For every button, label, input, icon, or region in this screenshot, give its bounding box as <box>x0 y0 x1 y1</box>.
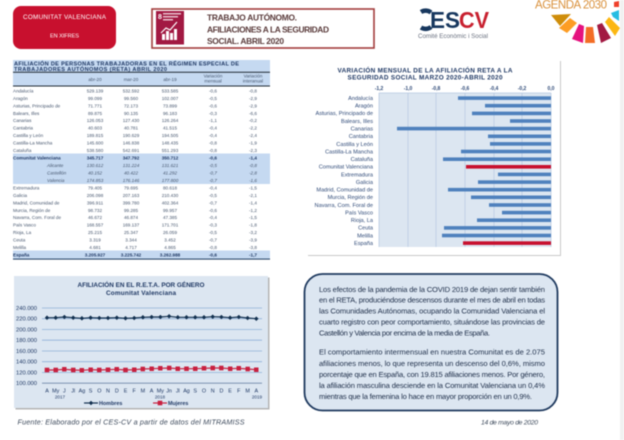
table rows: lower communities: -2,1 <box>249 193 257 198</box>
table rows: upper communities: 126.053 <box>87 118 104 123</box>
table rows: lower communities <box>13 186 257 250</box>
x axis labels: Jn <box>166 388 172 394</box>
chart title: AFILIACIÓN EN EL R.E.T.A. POR GÉNERO <box>78 280 205 289</box>
x axis labels: My <box>52 388 60 394</box>
x axis labels: M <box>141 388 146 394</box>
y axis labels: 220.000 <box>16 317 37 323</box>
x axis labels: S <box>89 388 93 394</box>
category labels: Melilla <box>357 233 374 239</box>
table rows: upper communities: 538.580 <box>87 148 104 153</box>
category labels: Asturias, Principado de <box>315 111 373 117</box>
category labels: Cantabria <box>349 134 374 140</box>
table rows: upper communities: 40.603 <box>88 126 102 131</box>
x axis labels: N <box>211 388 215 394</box>
table rows: lower communities: 80.618 <box>163 186 177 191</box>
table rows: lower communities: -0,5 <box>209 193 217 198</box>
logo: Agenda 2030 wheel <box>535 0 620 43</box>
paragraph 2: la afiliación masculina desciende en la Comunitat Valenciana un 0,4% <box>319 381 545 390</box>
category labels: Canarias <box>351 126 373 132</box>
highlighted rows: Comunitat Valenciana: Valencia <box>47 178 65 183</box>
table rows: lower communities: -3,2 <box>249 230 257 235</box>
badge: Comunitat Valenciana en xifres: EN XIFRES <box>50 34 79 40</box>
x axis labels: F <box>133 388 137 394</box>
table rows: lower communities: 79.695 <box>124 186 138 191</box>
table rows: upper communities: 194.505 <box>162 133 179 138</box>
table rows: lower communities: Madrid, Comunidad de <box>13 200 60 205</box>
highlighted rows: Comunitat Valenciana: 176.146 <box>123 178 140 183</box>
table rows: upper communities: 529.139 <box>87 89 104 94</box>
badge: Comunitat Valenciana en xifres: COMUNITAT VALENCIANA <box>23 14 107 21</box>
y axis labels: 140.000 <box>16 360 37 366</box>
highlighted rows: Comunitat Valenciana <box>13 154 270 184</box>
category labels: Balears, Illes <box>341 119 373 125</box>
table rows: lower communities: -0,3 <box>209 223 217 228</box>
category labels: Navarra, Com. Foral de <box>315 203 373 209</box>
x axis labels: A <box>150 388 154 394</box>
chart title: SEGURIDAD SOCIAL MARZO 2020-ABRIL 2020 <box>348 74 503 82</box>
table rows: lower communities: 25.347 <box>124 230 138 235</box>
table rows: upper communities: -0,8 <box>249 89 257 94</box>
table rows: upper communities: Castilla y León <box>13 133 44 138</box>
table rows: upper communities: -2,9 <box>249 96 257 101</box>
table rows: lower communities: 3.344 <box>125 237 137 242</box>
table rows: lower communities: -1,5 <box>249 215 257 220</box>
table rows: lower communities: 79.405 <box>88 186 102 191</box>
table rows: lower communities: 399.780 <box>123 200 140 205</box>
table rows: lower communities: -1,8 <box>249 223 257 228</box>
category labels: Madrid, Comunidad de <box>316 188 373 194</box>
category labels: Galicia <box>356 180 374 186</box>
y axis labels <box>16 306 37 387</box>
table rows: upper communities: -0,8 <box>209 148 217 153</box>
x axis labels: A <box>45 388 49 394</box>
table rows: upper communities: 72.173 <box>124 103 138 108</box>
highlighted rows: Comunitat Valenciana: 40.152 <box>88 171 102 176</box>
highlighted rows: Comunitat Valenciana: -0,6 <box>209 156 217 161</box>
table rows: lower communities: Ceuta <box>13 237 26 242</box>
table total row: España: España <box>13 252 30 257</box>
table rows: upper communities: -0,2 <box>249 118 257 123</box>
value axis labels: -1,0 <box>404 86 413 92</box>
value axis labels: -0,2 <box>518 86 527 92</box>
table rows: upper communities: 102.007 <box>162 96 179 101</box>
table header: abr-20 <box>88 77 102 82</box>
x axis labels: 2019 <box>252 394 263 399</box>
table rows: upper communities: 90.135 <box>124 111 138 116</box>
table rows: upper communities: 542.691 <box>123 148 140 153</box>
panel: line chart by gender <box>14 276 270 410</box>
highlighted rows: Comunitat Valenciana: -0,7 <box>209 171 217 176</box>
table rows: upper communities: -0,6 <box>209 103 217 108</box>
bars <box>397 96 551 245</box>
table rows: lower communities: País Vasco <box>13 223 36 228</box>
x axis labels: D <box>219 388 223 394</box>
logo: CES-CV: CV <box>459 7 490 33</box>
series: Mujeres <box>47 368 256 370</box>
table rows: upper communities: 190.629 <box>123 133 140 138</box>
y axis labels: 200.000 <box>16 328 37 334</box>
x axis labels: Ag <box>183 388 190 394</box>
table rows: upper communities: 73.899 <box>163 103 177 108</box>
table rows: lower communities: 46.874 <box>124 215 138 220</box>
logo: CES-CV: ES <box>430 7 460 33</box>
highlighted rows: Comunitat Valenciana: -0,8 <box>249 163 257 168</box>
table rows: lower communities: Extremadura <box>13 186 40 191</box>
value axis labels: -0,6 <box>461 86 470 92</box>
logo: CES-CV <box>418 7 490 40</box>
table rows: lower communities: 47.385 <box>163 215 177 220</box>
table rows: upper communities: 148.435 <box>162 140 179 145</box>
panel: monthly variation bar chart <box>307 60 561 256</box>
table rows: upper communities: Cantabria <box>13 126 33 131</box>
table rows: lower communities: Murcia, Región de <box>13 208 51 213</box>
table rows: upper communities: 551.293 <box>162 148 179 153</box>
paragraph 1: cuarto registro con peor comportamiento, situándose las provincias de <box>319 318 545 326</box>
highlighted rows: Comunitat Valenciana: 177.800 <box>162 178 179 183</box>
highlighted rows: Comunitat Valenciana: Alicante <box>46 163 64 168</box>
table rows: lower communities: 396.911 <box>87 200 104 205</box>
table rows: lower communities: -0,6 <box>209 208 217 213</box>
legend <box>84 401 188 407</box>
table total row: España: -0,6 <box>209 252 217 257</box>
value axis labels: -0,4 <box>490 86 499 92</box>
paragraph 1: en el RETA, produciéndose descensos durante el mes de abril en todas <box>319 296 545 304</box>
highlighted rows: Comunitat Valenciana: 131.621 <box>162 163 179 168</box>
table rows: upper communities: -2,4 <box>249 133 257 138</box>
paragraph 2: El comportamiento intermensual en nuestra Comunitat es de 2.075 <box>319 348 545 356</box>
table header: mar-20 <box>124 77 139 82</box>
x axis labels: M <box>245 388 250 394</box>
table rows: lower communities: 26.059 <box>163 230 177 235</box>
table rows: upper communities: 126.264 <box>162 118 179 123</box>
table rows: upper communities: -1,1 <box>209 118 217 123</box>
category labels: País Vasco <box>345 210 373 216</box>
highlighted rows: Comunitat Valenciana: -0,7 <box>209 178 217 183</box>
highlighted rows: Comunitat Valenciana: 347.792 <box>123 156 140 161</box>
x axis labels <box>45 388 263 399</box>
highlighted rows: Comunitat Valenciana: 350.712 <box>162 156 179 161</box>
x axis labels: S <box>193 388 197 394</box>
category labels: Andalucía <box>348 96 374 102</box>
x axis labels: 2017 <box>55 394 66 399</box>
table rows: lower communities: 99.285 <box>124 208 138 213</box>
y axis labels: 180.000 <box>16 338 37 344</box>
table header: mensual <box>204 78 222 84</box>
table rows: upper communities: -2,2 <box>249 126 257 131</box>
table rows: upper communities: 96.183 <box>163 111 177 116</box>
table rows: lower communities: -0,4 <box>209 186 217 191</box>
x axis labels: Jl <box>176 388 180 394</box>
table rows: lower communities: 4.865 <box>164 245 176 250</box>
x axis labels: Ag <box>79 388 85 394</box>
table title <box>13 60 270 73</box>
table rows: lower communities: -0,7 <box>209 237 217 242</box>
table rows: lower communities: Melilla <box>13 245 26 250</box>
highlighted rows: Comunitat Valenciana: 130.612 <box>87 163 104 168</box>
x axis labels: A <box>254 388 258 394</box>
source note: Fuente: Elaborado por el CES-CV a partir de datos del MITRAMISS <box>18 418 245 426</box>
y axis labels: 160.000 <box>16 349 37 355</box>
icon: SDG 8 decent work <box>156 11 184 44</box>
value axis labels: -1,2 <box>375 86 384 92</box>
table rows: lower communities: -1,4 <box>249 200 257 205</box>
table total row: España: 3.225.742 <box>121 252 142 257</box>
table rows: upper communities: -0,5 <box>209 96 217 101</box>
table header: interanual <box>243 78 263 84</box>
x axis labels: O <box>97 388 101 394</box>
paragraph 2: mientras que la femenina lo hace en mayor proporción en un 0,9%. <box>319 392 532 401</box>
category labels: Rioja, La <box>351 218 374 224</box>
table rows: upper communities: -6,6 <box>249 111 257 116</box>
table rows: upper communities: 189.815 <box>87 133 104 138</box>
table rows: lower communities: 25.215 <box>88 230 102 235</box>
category labels: Castilla-La Mancha <box>325 149 374 155</box>
plot background <box>379 93 551 247</box>
table rows: upper communities <box>13 89 257 153</box>
table rows: upper communities: 41.515 <box>163 126 177 131</box>
paragraph 2: porcentaje que en España, con 19.815 afiliaciones menos. Por género, <box>319 370 545 379</box>
highlighted rows: Comunitat Valenciana: Castellón <box>47 171 67 176</box>
value axis labels <box>375 86 555 92</box>
table header: abr-19 <box>163 77 177 82</box>
logo: CES-CV: Comité Econòmic i Social <box>418 33 488 40</box>
paragraph 2: afiliaciones menos, lo que representa un descenso del 0,6%, mismo <box>319 359 545 368</box>
table rows: upper communities: -0,8 <box>209 140 217 145</box>
table rows: lower communities: 4.681 <box>89 245 101 250</box>
x axis labels: E <box>124 388 128 394</box>
y axis labels: 120.000 <box>16 370 37 376</box>
paragraph 2 <box>319 348 545 401</box>
table rows: upper communities: -1,9 <box>249 140 257 145</box>
table rows: upper communities: Asturias, Principado de <box>13 103 61 108</box>
y axis labels: 240.000 <box>16 306 37 312</box>
highlighted rows: Comunitat Valenciana: Comunitat Valenciana <box>13 156 61 161</box>
table rows: upper communities: Aragón <box>13 96 28 101</box>
chart title: Comunitat Valenciana <box>106 290 176 297</box>
table rows: lower communities: 171.701 <box>162 223 179 228</box>
x axis labels: E <box>228 388 232 394</box>
category labels: Extremadura <box>341 172 374 178</box>
table: afiliación RETA by community <box>13 60 270 260</box>
x axis labels: O <box>202 388 206 394</box>
category labels: Castilla y León <box>336 142 373 148</box>
table title: AFILIACIÓN DE PERSONAS TRABAJADORAS EN EL RÉGIMEN ESPECIAL DE <box>14 60 239 68</box>
table rows: lower communities: 3.452 <box>164 237 176 242</box>
x axis labels: N <box>106 388 110 394</box>
highlighted rows: Comunitat Valenciana: 174.853 <box>87 178 104 183</box>
table rows: upper communities: 71.771 <box>88 103 102 108</box>
series: Hombres <box>47 316 256 319</box>
category labels: España <box>354 241 374 247</box>
table rows: lower communities: -3,8 <box>249 245 257 250</box>
value axis labels: -0,8 <box>432 86 441 92</box>
table rows: upper communities: Canarias <box>13 118 32 123</box>
table total row: España <box>13 250 270 260</box>
table rows: lower communities: Rioja, La <box>13 230 32 235</box>
table rows: upper communities: Balears, Illes <box>13 111 40 116</box>
category labels: Ceuta <box>358 226 374 232</box>
table rows: upper communities: 146.838 <box>123 140 140 145</box>
x axis labels: Jl <box>71 388 75 394</box>
category labels: Aragón <box>355 104 373 110</box>
table rows: lower communities: 3.319 <box>89 237 101 242</box>
table rows: upper communities: 533.585 <box>162 89 179 94</box>
legend: Hombres <box>99 401 122 407</box>
table total row: España: 3.262.988 <box>160 252 181 257</box>
category labels: Comunitat Valenciana <box>319 165 374 171</box>
highlighted rows: Comunitat Valenciana: 40.422 <box>124 171 138 176</box>
paragraph 1: las Comunidades Autónomas, ocupando la Comunidad Valenciana el <box>319 306 545 316</box>
table rows: lower communities: -3,9 <box>249 237 257 242</box>
table rows: lower communities: 99.957 <box>163 208 177 213</box>
legend: Mujeres <box>168 401 188 407</box>
heading: AFILIACIONES A LA SEGURIDAD <box>207 24 329 34</box>
x axis labels: F <box>237 388 241 394</box>
heading: TRABAJO AUTÓNOMO. <box>207 12 297 22</box>
table rows: upper communities: Cataluña <box>13 148 32 153</box>
table rows: upper communities: -0,4 <box>209 126 217 131</box>
y axis labels: 100.000 <box>16 381 37 387</box>
panel: commentary text box <box>304 274 558 410</box>
table rows: lower communities: 4.717 <box>125 245 137 250</box>
table rows: upper communities: Andalucía <box>13 89 34 94</box>
table rows: lower communities: -0,4 <box>209 215 217 220</box>
table rows: upper communities: 99.560 <box>124 96 138 101</box>
x axis labels: 2018 <box>155 394 166 399</box>
table rows: lower communities: 210.430 <box>162 193 179 198</box>
table rows: lower communities: 169.137 <box>123 223 140 228</box>
table rows: upper communities: 145.600 <box>87 140 104 145</box>
chart title <box>78 280 205 297</box>
category labels <box>315 96 374 247</box>
table header: Variación <box>204 74 223 78</box>
highlighted rows: Comunitat Valenciana: -1,4 <box>249 156 257 161</box>
table rows: upper communities: 532.592 <box>123 89 140 94</box>
highlighted rows: Comunitat Valenciana: -2,8 <box>249 171 257 176</box>
table rows: lower communities: 402.364 <box>162 200 179 205</box>
x axis labels: D <box>115 388 119 394</box>
paragraph 1: Los efectos de la pandemia de la COVID 2019 de dejan sentir también <box>319 285 545 294</box>
highlighted rows: Comunitat Valenciana: -1,6 <box>249 178 257 183</box>
table rows: upper communities: 40.781 <box>124 126 138 131</box>
highlighted rows: Comunitat Valenciana: 41.292 <box>163 171 177 176</box>
badge: Comunitat Valenciana en xifres <box>13 6 116 49</box>
table rows: upper communities: 127.430 <box>123 118 140 123</box>
table rows: upper communities: -2,3 <box>249 148 257 153</box>
category labels: Murcia, Región de <box>328 195 373 201</box>
table rows: lower communities: 46.672 <box>88 215 102 220</box>
heading: SOCIAL. ABRIL 2020 <box>207 36 284 46</box>
table rows: upper communities: Castilla-La Mancha <box>13 140 53 145</box>
highlighted rows: Comunitat Valenciana: -0,5 <box>209 163 217 168</box>
table rows: lower communities: -0,5 <box>209 230 217 235</box>
table rows: lower communities: 207.163 <box>123 193 140 198</box>
x axis labels: My <box>157 388 164 394</box>
table rows: upper communities: 89.875 <box>88 111 102 116</box>
table rows: lower communities: -1,2 <box>249 208 257 213</box>
date: 14 de mayo de 2020 <box>481 420 538 426</box>
icon: SDG 8 decent work: 8 <box>158 14 162 21</box>
table rows: upper communities: -0,4 <box>209 133 217 138</box>
table rows: lower communities: 168.557 <box>87 223 104 228</box>
table total row: España: -1,7 <box>249 252 257 257</box>
plot gridlines <box>42 308 262 383</box>
table rows: upper communities: 99.099 <box>88 96 102 101</box>
table rows: lower communities: -0,8 <box>209 245 217 250</box>
table title: TRABAJADORES AUTÓNOMOS (RETA) ABRIL 2020 <box>14 65 167 73</box>
table rows: upper communities: -2,9 <box>249 103 257 108</box>
table rows: upper communities: -0,3 <box>209 111 217 116</box>
category labels: Cataluña <box>351 157 374 163</box>
heading <box>207 12 329 46</box>
table total row: España: 3.205.927 <box>85 252 106 257</box>
table rows: lower communities: 206.098 <box>87 193 104 198</box>
table rows: lower communities: Galicia <box>13 193 27 198</box>
highlighted rows: Comunitat Valenciana: 131.224 <box>123 163 140 168</box>
chart title <box>338 66 513 82</box>
highlighted rows: Comunitat Valenciana: 345.717 <box>87 156 104 161</box>
table header: Variación <box>244 74 263 78</box>
paragraph 1: Castellón y Valencia por encima de la media de España. <box>319 328 490 338</box>
table rows: lower communities: -0,7 <box>209 200 217 205</box>
x axis labels: J <box>63 388 66 394</box>
table rows: lower communities: 98.732 <box>88 208 102 213</box>
table rows: lower communities: -1,5 <box>249 186 257 191</box>
value axis labels: 0,0 <box>548 86 555 92</box>
paragraph 1 <box>319 285 545 338</box>
table rows: upper communities: -0,6 <box>209 89 217 94</box>
chart title: VARIACIÓN MENSUAL DE LA AFILIACIÓN RETA A LA <box>338 66 513 74</box>
title banner <box>152 9 374 48</box>
table rows: lower communities: Navarra, Com. Foral de <box>13 215 61 220</box>
table header <box>13 72 270 86</box>
